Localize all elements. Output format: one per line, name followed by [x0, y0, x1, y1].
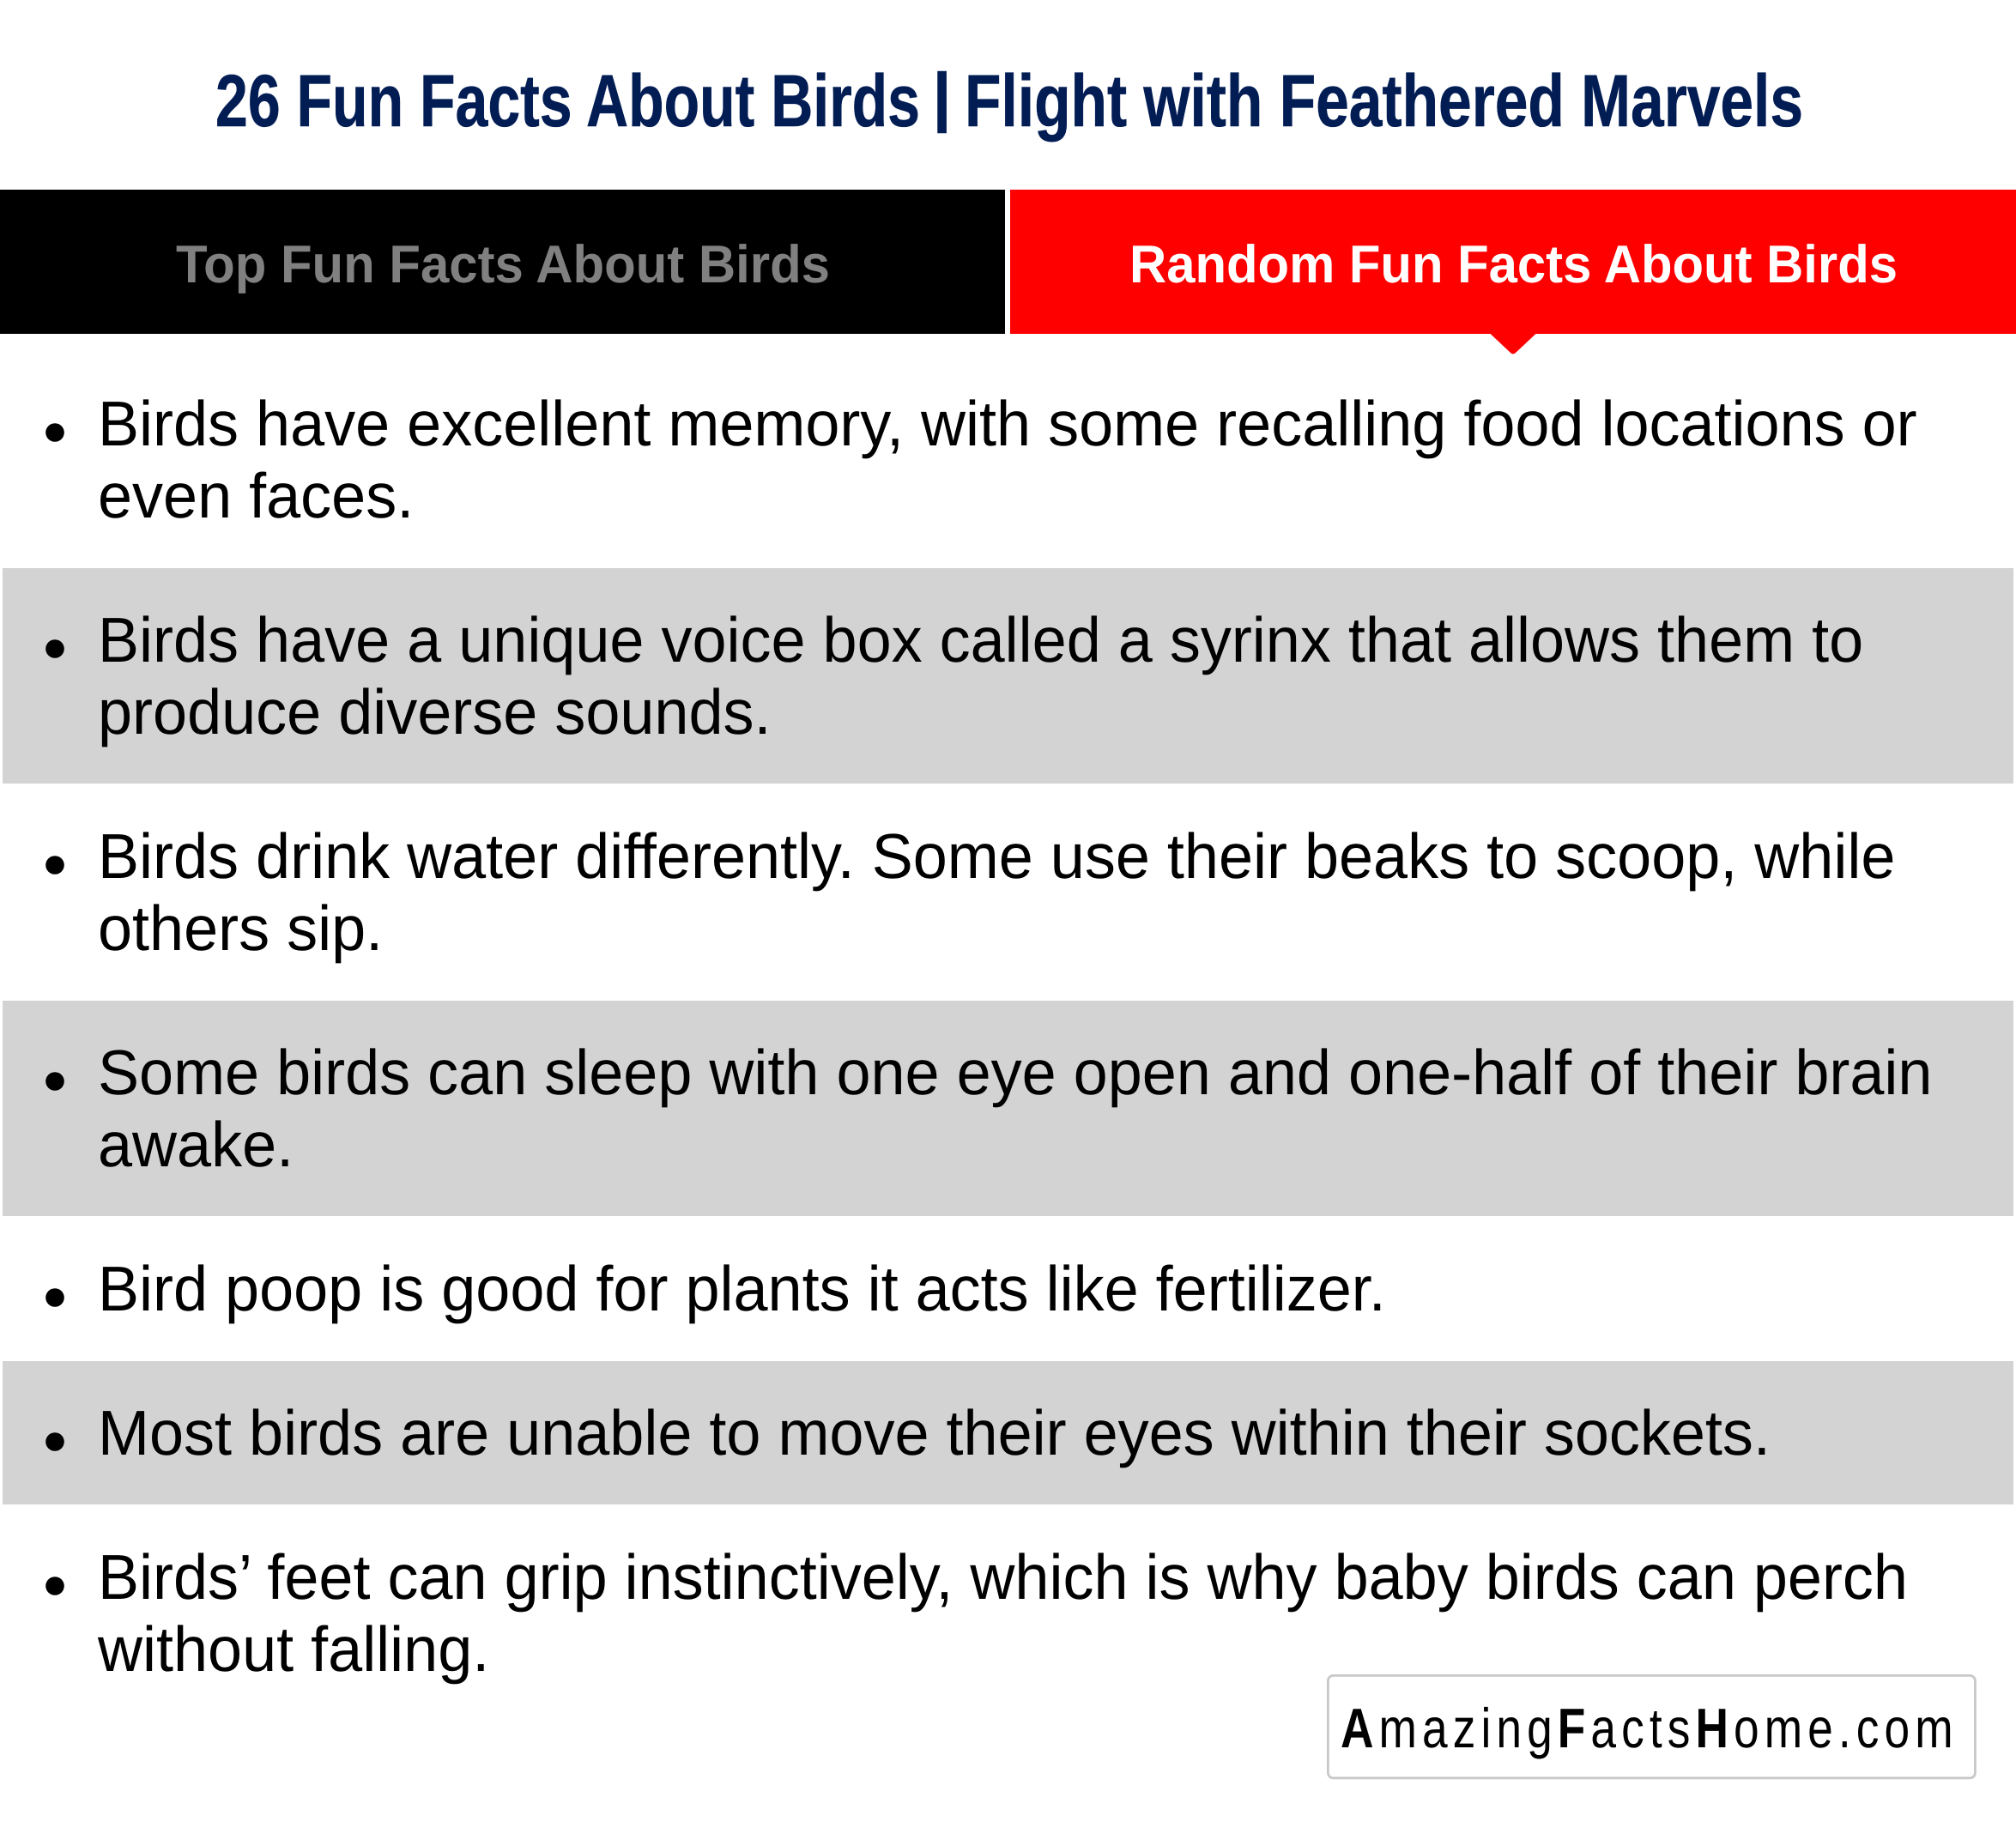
- fact row 2: produce diverse sounds.: [98, 676, 772, 747]
- title: Flight with Feathered Marvels: [965, 60, 1803, 142]
- fact row 2: [3, 568, 2013, 784]
- title: [215, 60, 1803, 142]
- fact row 1: Birds have excellent memory, with some recalling food locations or: [98, 388, 1917, 459]
- fact row 6: Most birds are unable to move their eyes within their sockets.: [98, 1397, 1771, 1468]
- fact row 7: Birds’ feet can grip instinctively, which is why baby birds can perch: [98, 1541, 1908, 1613]
- tab: random fun facts (active): Random Fun Facts About Birds: [1129, 235, 1898, 294]
- tab: top fun facts (inactive): Top Fun Facts About Birds: [176, 235, 830, 294]
- fact row 4: Some birds can sleep with one eye open and one-half of their brain: [98, 1037, 1932, 1108]
- title: |: [933, 60, 951, 133]
- title: 26 Fun Facts About Birds: [215, 60, 920, 142]
- watermark logo box: AmazingFactsHome.com: [1341, 1697, 1958, 1759]
- fact row 7: without falling.: [97, 1613, 489, 1685]
- fact row 1: [45, 388, 1917, 531]
- fact row 3: others sip.: [98, 893, 383, 964]
- fact row 4: [3, 1001, 2013, 1216]
- fact row 1: even faces.: [98, 460, 414, 531]
- watermark logo box: [1328, 1675, 1975, 1778]
- fact row 7: [45, 1541, 1908, 1685]
- fact row 6: [3, 1361, 2013, 1504]
- tab: random fun facts (active): [1010, 190, 2016, 354]
- fact row 5: Bird poop is good for plants it acts like fertilizer.: [98, 1253, 1386, 1324]
- fact row 4: awake.: [98, 1109, 294, 1180]
- fact row 3: [45, 820, 1895, 964]
- fact row 2: Birds have a unique voice box called a syrinx that allows them to: [98, 604, 1863, 675]
- fact row 3: Birds drink water differently. Some use their beaks to scoop, while: [98, 820, 1895, 892]
- tab: top fun facts (inactive): [0, 190, 1005, 334]
